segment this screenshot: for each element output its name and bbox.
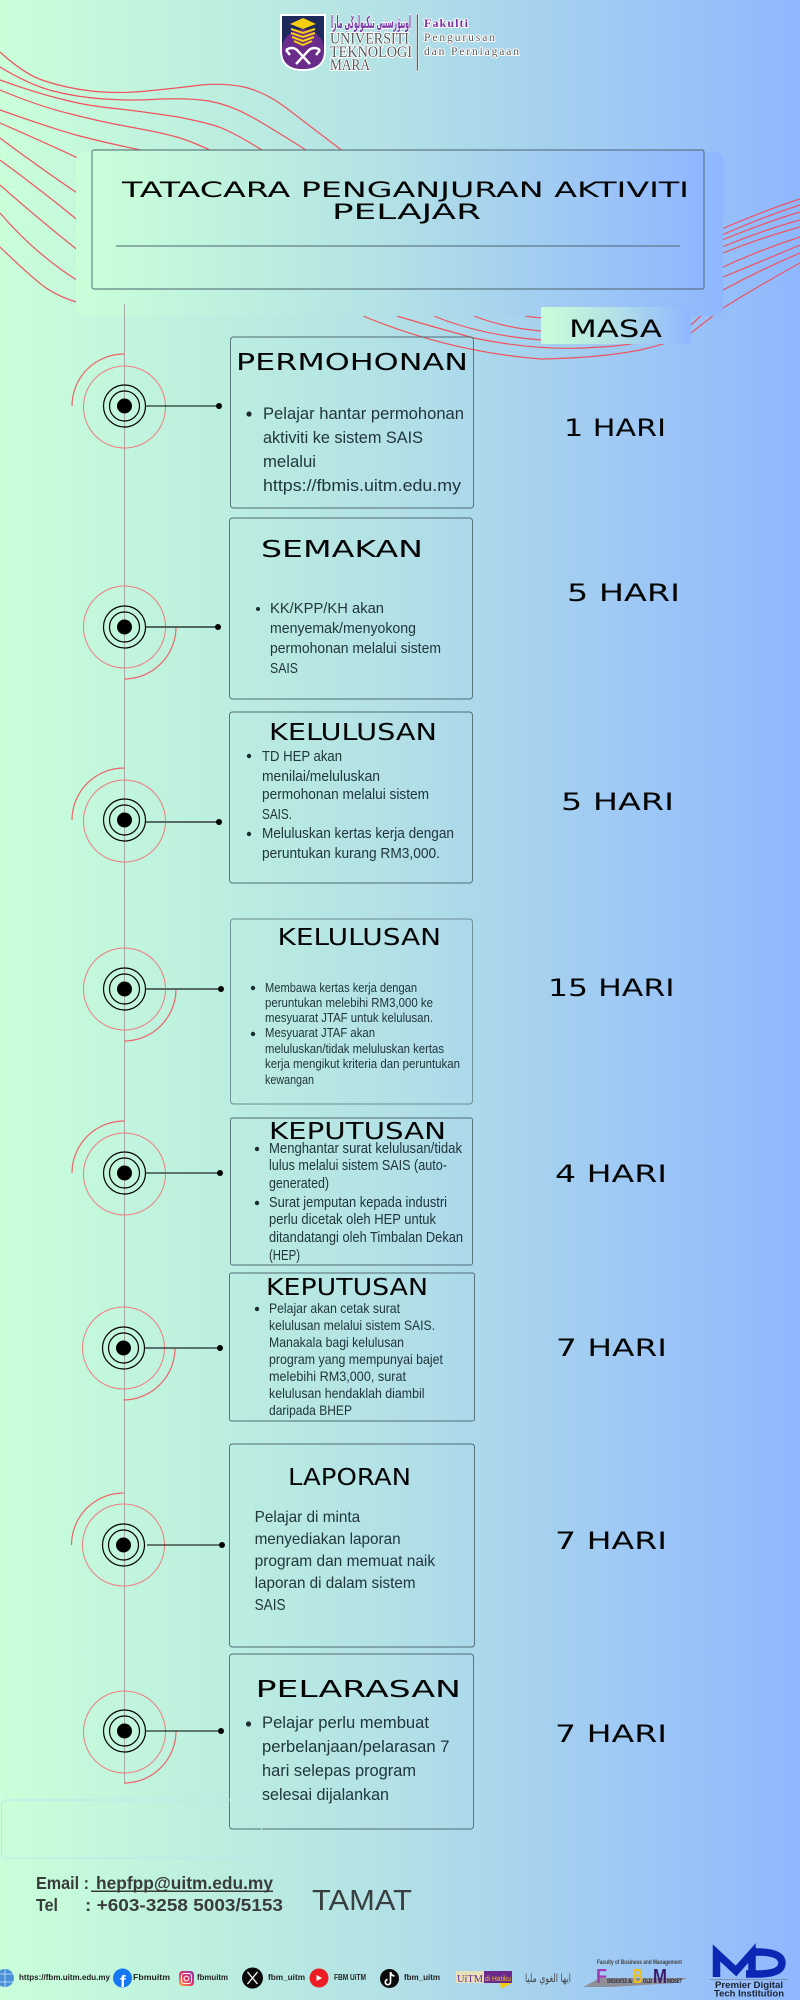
timeline marker 8 bbox=[84, 1691, 224, 1783]
panel: KEPUTUSAN 1: perlu dicetak oleh HEP untuk bbox=[269, 1212, 437, 1228]
panel: KEPUTUSAN 2 bbox=[230, 1273, 474, 1421]
website: https://fbm.uitm.edu.my bbox=[19, 1973, 111, 1982]
timeline marker 6 bbox=[82, 1307, 223, 1400]
duration 5: 4 HARI bbox=[555, 1160, 667, 1188]
panel: KELULUSAN 1: SAIS. bbox=[262, 806, 292, 823]
faculty name: Pengurusan bbox=[424, 32, 495, 44]
panel: KELULUSAN 2: Membawa kertas kerja dengan bbox=[265, 980, 417, 995]
panel: PELARASAN: perbelanjaan/pelarasan 7 bbox=[262, 1737, 450, 1756]
youtube handle: FBM UiTM bbox=[334, 1973, 366, 1982]
logo: FBM mindset: ORESIGHTED bbox=[607, 1979, 627, 1985]
faculty name bbox=[424, 16, 519, 58]
panel: SEMAKAN bbox=[230, 518, 472, 699]
logo divider bbox=[416, 14, 418, 71]
duration 4: 15 HARI bbox=[548, 974, 674, 1002]
panel: PERMOHONAN: aktiviti ke sistem SAIS bbox=[263, 428, 423, 447]
logo: MD Premier Digital Tech Institution bbox=[710, 1952, 788, 2000]
university name: TEKNOLOGI bbox=[330, 44, 412, 61]
logo: FBM mindset: & bbox=[628, 1979, 633, 1985]
panel: MASA heading bbox=[541, 307, 691, 344]
logo: FBM mindset: M bbox=[653, 1966, 667, 1988]
panel: KEPUTUSAN 1: Surat jemputan kepada industri bbox=[269, 1195, 447, 1211]
panel: KELULUSAN 2: kerja mengikut kriteria dan peruntukan bbox=[265, 1056, 460, 1071]
panel: SEMAKAN: menyemak/menyokong bbox=[270, 621, 416, 637]
duration 2: 5 HARI bbox=[567, 579, 680, 607]
panel: PELARASAN: hari selepas program bbox=[262, 1761, 416, 1780]
logo: UiTM faculty: اونيۏرسيتي تيكنولوݢي مارا bbox=[331, 13, 411, 33]
icon: tiktok bbox=[380, 1969, 399, 1988]
panel: KEPUTUSAN 2: Pelajar akan cetak surat bbox=[269, 1300, 400, 1316]
panel: KEPUTUSAN 2: program yang mempunyai bajet bbox=[269, 1351, 443, 1367]
duration 1: 1 HARI bbox=[564, 414, 666, 442]
panel: KEPUTUSAN 1: ditandatangi oleh Timbalan Dekan bbox=[269, 1230, 463, 1246]
panel: LAPORAN: Pelajar di minta bbox=[255, 1509, 360, 1526]
title text: TATACARA PENGANJURAN AKTIVITI bbox=[120, 178, 689, 202]
icon: facebook bbox=[113, 1968, 132, 1991]
logo: MD Premier Digital Tech Institution: Tech Institution bbox=[714, 1988, 784, 2000]
panel: title bbox=[92, 150, 704, 289]
duration 6: 7 HARI bbox=[556, 1334, 667, 1362]
title text bbox=[120, 178, 689, 224]
faculty name: dan Perniagaan bbox=[424, 46, 519, 58]
panel: PERMOHONAN: PERMOHONAN bbox=[236, 350, 468, 376]
university name bbox=[330, 30, 412, 74]
panel: title backing bbox=[76, 152, 723, 316]
instagram handle: fbmuitm bbox=[197, 1973, 228, 1982]
logo: UiTM di Hatiku: UiTM bbox=[457, 1973, 483, 1985]
decorative red waves, top left bbox=[0, 52, 344, 303]
panel: KELULUSAN 1: TD HEP akan bbox=[262, 748, 342, 765]
TAMAT: TAMAT bbox=[312, 1885, 412, 1917]
panel: KELULUSAN 2: mesyuarat JTAF untuk kelulusan. bbox=[265, 1010, 433, 1025]
arabic motto: ايها الغوي مليا bbox=[525, 1972, 571, 1985]
title underline bbox=[116, 246, 680, 247]
logo: MD Premier Digital Tech Institution: Premier Digital bbox=[715, 1980, 783, 1991]
panel: KEPUTUSAN 1: KEPUTUSAN bbox=[269, 1119, 446, 1145]
timeline spine bbox=[124, 304, 126, 1784]
logo: FBM mindset: INDSET bbox=[667, 1979, 682, 1985]
contact details bbox=[36, 1873, 283, 1915]
icon: X bbox=[242, 1968, 263, 1988]
panel: SEMAKAN: permohonan melalui sistem bbox=[270, 641, 441, 657]
panel: KELULUSAN 1: peruntukan kurang RM3,000. bbox=[262, 845, 440, 862]
timeline marker 2 bbox=[84, 586, 221, 679]
panel: KEPUTUSAN 1 bbox=[230, 1118, 472, 1265]
panel: LAPORAN: menyediakan laporan bbox=[255, 1531, 401, 1548]
panel: KELULUSAN 1 bbox=[230, 712, 472, 883]
panel: KELULUSAN 1: KELULUSAN bbox=[269, 720, 437, 746]
timeline marker 3 bbox=[72, 768, 222, 862]
logo: FBM mindset: OLD bbox=[643, 1979, 652, 1985]
panel: KEPUTUSAN 2: Manakala bagi kelulusan bbox=[269, 1334, 404, 1350]
panel: PERMOHONAN: https://fbmis.uitm.edu.my bbox=[263, 476, 462, 495]
duration 8: 7 HARI bbox=[555, 1720, 667, 1748]
panel: SEMAKAN: KK/KPP/KH akan bbox=[270, 601, 384, 617]
timeline marker 1 bbox=[72, 354, 222, 448]
logo: UiTM faculty bbox=[281, 13, 519, 74]
logo: UiTM di Hatiku: di Hatiku bbox=[485, 1976, 511, 1983]
X handle: fbm_uitm bbox=[268, 1973, 305, 1982]
faint empty frame bbox=[2, 1800, 262, 1858]
panel: KELULUSAN 2: peruntukan melebihi RM3,000 ke bbox=[265, 995, 433, 1010]
timeline marker 5 bbox=[72, 1121, 223, 1215]
panel: PELARASAN bbox=[230, 1654, 474, 1829]
panel: PERMOHONAN: Pelajar hantar permohonan bbox=[263, 404, 464, 423]
panel: KELULUSAN 2: meluluskan/tidak meluluskan kertas bbox=[265, 1041, 444, 1056]
duration 7: 7 HARI bbox=[555, 1527, 667, 1555]
contact details: hepfpp@uitm.edu.my bbox=[96, 1873, 273, 1893]
panel: KEPUTUSAN 2: KEPUTUSAN bbox=[266, 1275, 428, 1301]
panel: KELULUSAN 2: kewangan bbox=[265, 1072, 314, 1087]
panel: LAPORAN: program dan memuat naik bbox=[255, 1553, 436, 1570]
panel: KEPUTUSAN 2: melebihi RM3,000, surat bbox=[269, 1368, 406, 1384]
facebook handle: Fbmuitm bbox=[133, 1973, 170, 1982]
tiktok handle: fbm_uitm bbox=[404, 1973, 440, 1982]
icon: website globe bbox=[0, 1969, 14, 1987]
panel: SEMAKAN: SAIS bbox=[270, 661, 298, 677]
panel: KEPUTUSAN 2: kelulusan melalui sistem SAIS. bbox=[269, 1317, 435, 1333]
panel: KELULUSAN 2: Mesyuarat JTAF akan bbox=[265, 1025, 375, 1040]
logo: FBM mindset bbox=[583, 1960, 687, 1988]
contact details: Tel bbox=[36, 1895, 58, 1915]
panel: KEPUTUSAN 1: (HEP) bbox=[269, 1248, 300, 1264]
timeline marker 7 bbox=[72, 1493, 225, 1586]
contact details: : +603-3258 5003/5153 bbox=[85, 1895, 283, 1915]
icon: UiTM shield bbox=[281, 15, 325, 70]
icon: youtube bbox=[310, 1968, 328, 1988]
panel: PERMOHONAN bbox=[230, 337, 474, 508]
logo: FBM mindset: B bbox=[633, 1966, 643, 1988]
icon: facebook: f bbox=[120, 1972, 126, 1991]
timeline marker 4 bbox=[84, 948, 224, 1041]
panel: KEPUTUSAN 2: kelulusan hendaklah diambil bbox=[269, 1385, 424, 1401]
title text: PELAJAR bbox=[332, 200, 481, 224]
logo: FBM mindset: Faculty of Business and Management bbox=[597, 1960, 682, 1966]
panel: KELULUSAN 2: KELULUSAN bbox=[278, 925, 441, 951]
university name: MARA bbox=[330, 57, 370, 74]
panel: KELULUSAN 1: permohonan melalui sistem bbox=[262, 786, 429, 803]
panel: KEPUTUSAN 2: daripada BHEP bbox=[269, 1402, 352, 1418]
panel: KEPUTUSAN 1: generated) bbox=[269, 1176, 329, 1192]
panel: KELULUSAN 1: menilai/meluluskan bbox=[262, 768, 380, 785]
panel: KEPUTUSAN 1: lulus melalui sistem SAIS (auto- bbox=[269, 1158, 447, 1174]
icon: instagram bbox=[179, 1971, 194, 1986]
panel: PERMOHONAN: melalui bbox=[263, 452, 316, 471]
panel: KELULUSAN 2 bbox=[230, 919, 472, 1104]
duration 3: 5 HARI bbox=[561, 788, 674, 816]
contact details: Email : bbox=[36, 1873, 89, 1893]
panel: LAPORAN: laporan di dalam sistem bbox=[255, 1575, 416, 1592]
panel: PELARASAN: selesai dijalankan bbox=[262, 1785, 389, 1804]
panel: LAPORAN bbox=[230, 1444, 474, 1647]
decorative red waves, right bbox=[363, 199, 800, 359]
panel: SEMAKAN: SEMAKAN bbox=[261, 537, 423, 563]
panel: LAPORAN: SAIS bbox=[255, 1597, 286, 1614]
logo: FBM mindset: F bbox=[596, 1966, 607, 1988]
panel: MASA heading: MASA bbox=[569, 315, 663, 343]
panel: KEPUTUSAN 1: Menghantar surat kelulusan/tidak bbox=[269, 1141, 463, 1157]
panel: LAPORAN: LAPORAN bbox=[288, 1465, 411, 1491]
university name: UNIVERSITI bbox=[330, 30, 409, 48]
panel: KELULUSAN 1: Meluluskan kertas kerja dengan bbox=[262, 825, 454, 842]
logo: UiTM di Hatiku bbox=[456, 1971, 512, 1989]
panel: PELARASAN: Pelajar perlu membuat bbox=[262, 1713, 429, 1732]
panel: PELARASAN: PELARASAN bbox=[256, 1677, 461, 1703]
footer social links bbox=[0, 1968, 440, 1991]
faculty name: Fakulti bbox=[424, 16, 469, 30]
